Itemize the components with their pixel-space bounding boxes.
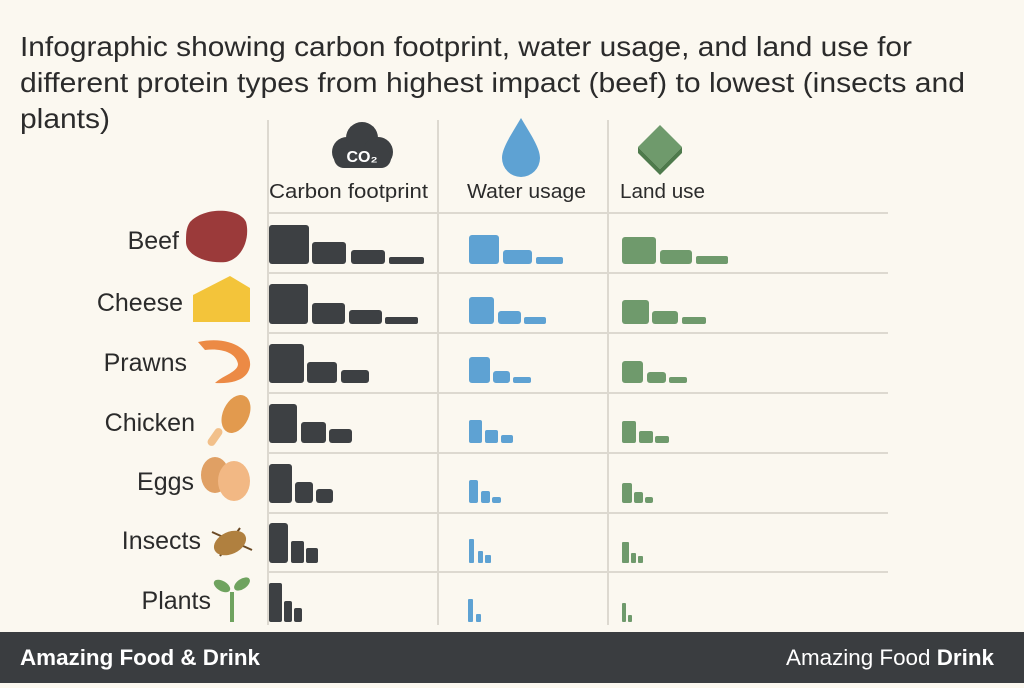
icon: land diamond (638, 125, 682, 175)
header: land use: Land use (620, 181, 705, 203)
header: water usage: Water usage (467, 181, 586, 203)
icon: CO2 cloud (332, 122, 393, 168)
header: carbon footprint: Carbon footprint (269, 181, 428, 203)
footer bar: Amazing Food & Drink (20, 645, 261, 670)
icon: eggs (201, 457, 250, 501)
row labels: Chicken (105, 409, 195, 437)
chart: carbon bars (269, 225, 424, 622)
icon: cheese (193, 276, 250, 322)
row labels: Plants (142, 587, 211, 615)
title: plants) (20, 103, 110, 134)
header: land use (620, 125, 705, 203)
icon: beetle (210, 526, 252, 560)
footer bar: Amazing Food Drink (786, 645, 995, 670)
header: water usage (467, 118, 586, 203)
chart: water bars (468, 235, 563, 622)
title: different protein types from highest impact (beef) to lowest (insects and (20, 67, 965, 98)
row labels: Eggs (137, 468, 194, 496)
icon: chicken leg (206, 390, 256, 447)
row labels: Prawns (104, 349, 187, 377)
row labels: Insects (122, 527, 201, 555)
row labels: Beef (128, 227, 179, 255)
icon: prawn (198, 340, 250, 383)
title: Infographic showing carbon footprint, water usage, and land use for (20, 31, 912, 62)
row labels (97, 227, 211, 615)
row labels: Cheese (97, 289, 183, 317)
icon: sprout (212, 575, 252, 622)
icon: water drop (502, 118, 540, 177)
footer bar (0, 632, 1024, 683)
icon: beef steak (186, 211, 247, 262)
header: carbon footprint (269, 122, 428, 203)
chart: land bars (622, 237, 728, 622)
icon: CO2 cloud: CO₂ (346, 149, 378, 166)
